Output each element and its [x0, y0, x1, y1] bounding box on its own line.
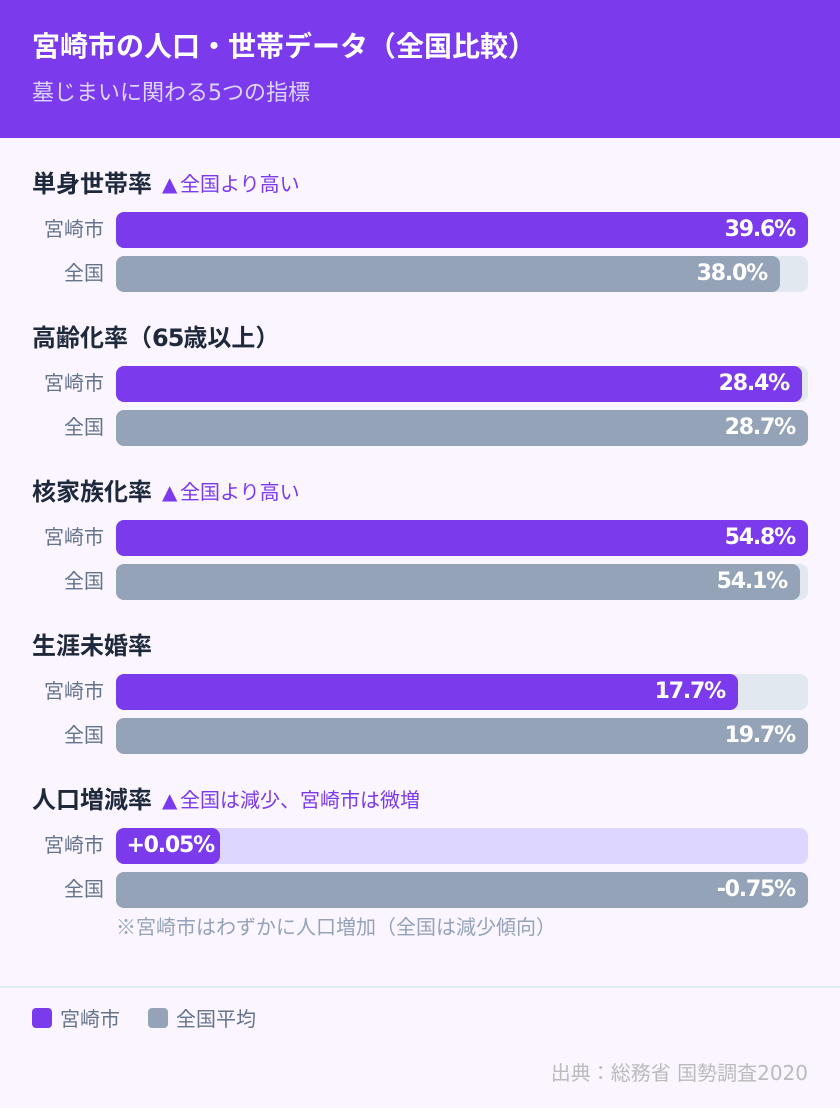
label: 宮崎市: [44, 829, 104, 858]
header banner: [0, 0, 840, 138]
subtitle: 墓じまいに関わる5つの指標: [32, 75, 310, 107]
bar: 全国 19.7%: 19.7%: [725, 723, 795, 748]
label: 全国: [64, 873, 104, 902]
legend label: 宮崎市: [60, 1003, 120, 1032]
bar: 宮崎市 28.4%: 28.4%: [719, 371, 789, 396]
bar: 宮崎市 54.8%: 54.8%: [725, 525, 795, 550]
label: 全国: [64, 411, 104, 440]
note: 全国は減少、宮崎市は微増: [180, 784, 420, 813]
bar: 宮崎市 54.8%: [116, 520, 808, 556]
label: 全国: [64, 257, 104, 286]
panel: 核家族化率: [32, 472, 808, 600]
legend label: 全国平均: [176, 1003, 256, 1032]
heading: 人口増減率: [32, 780, 152, 815]
panel: 生涯未婚率: [32, 626, 808, 754]
note: 全国より高い: [180, 168, 300, 197]
note: ▲: [162, 480, 177, 504]
legend: [32, 1003, 256, 1032]
label: 宮崎市: [44, 367, 104, 396]
bar: 全国 19.7%: [116, 718, 808, 754]
label: 宮崎市: [44, 521, 104, 550]
heading: 高齢化率（65歳以上）: [32, 318, 279, 353]
bar: 宮崎市 17.7%: 17.7%: [655, 679, 725, 704]
bar: 全国 -0.75%: -0.75%: [717, 877, 795, 902]
bar: 全国 54.1%: [116, 564, 808, 600]
bar: 宮崎市 +0.05%: [116, 828, 808, 864]
bar: 全国 38.0%: 38.0%: [697, 261, 767, 286]
note: ▲: [162, 172, 177, 196]
heading: 生涯未婚率: [32, 626, 152, 661]
bar: 宮崎市 17.7%: [116, 674, 808, 710]
panel: 人口増減率: [32, 780, 808, 940]
bar: 全国 28.7%: [116, 410, 808, 446]
panel: 単身世帯率: [32, 164, 808, 292]
label: 全国: [64, 565, 104, 594]
footnote: ※宮崎市はわずかに人口増加（全国は減少傾向）: [116, 911, 556, 940]
heading: 単身世帯率: [32, 164, 152, 199]
bar: 宮崎市 39.6%: [116, 212, 808, 248]
label: 全国: [64, 719, 104, 748]
bar: 宮崎市 39.6%: 39.6%: [725, 217, 795, 242]
heading: 核家族化率: [32, 472, 152, 507]
title: 宮崎市の人口・世帯データ（全国比較）: [32, 25, 536, 65]
source: 出典：総務省 国勢調査2020: [551, 1057, 808, 1086]
panel: 高齢化率: [32, 318, 808, 446]
bar: 全国 28.7%: 28.7%: [725, 415, 795, 440]
label: 宮崎市: [44, 213, 104, 242]
note: ▲: [162, 788, 177, 812]
label: 宮崎市: [44, 675, 104, 704]
bar: 全国 54.1%: 54.1%: [717, 569, 787, 594]
legend swatch: 全国平均: [148, 1008, 168, 1028]
note: 全国より高い: [180, 476, 300, 505]
bar: 全国 -0.75%: [116, 872, 808, 908]
bar: 宮崎市 28.4%: [116, 366, 808, 402]
bar: 宮崎市 +0.05%: +0.05%: [126, 833, 214, 858]
legend swatch: 宮崎市: [32, 1008, 52, 1028]
bar: 全国 38.0%: [116, 256, 808, 292]
